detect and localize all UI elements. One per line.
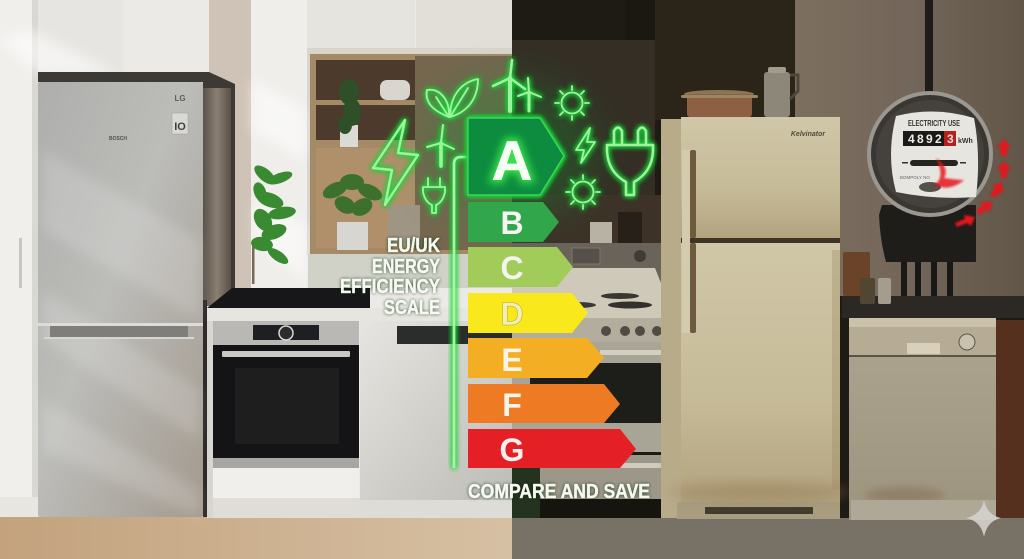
icon: two wind turbines bbox=[493, 60, 541, 111]
red rising arrows bbox=[955, 139, 1011, 227]
old dishwasher bbox=[849, 318, 996, 520]
meter fine print: BOMPOLY NO bbox=[900, 175, 930, 180]
meter dial face bbox=[891, 111, 978, 198]
meter reading: 9 bbox=[926, 132, 933, 146]
class G chevron: G bbox=[500, 432, 524, 468]
meter casing bbox=[869, 93, 991, 215]
meter reading: 8 bbox=[917, 132, 924, 146]
shelf niche bbox=[310, 54, 512, 254]
fridge brand: Bosch: BOSCH bbox=[109, 136, 127, 142]
electricity meter bbox=[869, 0, 1011, 296]
icon: large plug bbox=[607, 128, 653, 195]
scale title: EFFICIENCY bbox=[340, 276, 441, 298]
modern steel fridge bbox=[38, 72, 235, 517]
scale title: EU/UK bbox=[387, 235, 440, 257]
class D chevron: D bbox=[500, 296, 524, 332]
class F chevron bbox=[468, 384, 620, 423]
class G chevron bbox=[468, 429, 636, 468]
neon eco icons bbox=[373, 60, 653, 213]
class F chevron: F bbox=[502, 387, 522, 423]
class A chevron: A bbox=[492, 129, 532, 192]
class A chevron: A bbox=[492, 129, 532, 192]
fridge energy badge: IO bbox=[174, 121, 186, 133]
modern dishwasher bbox=[360, 321, 512, 518]
panel: efficient modern kitchen (left) bbox=[0, 0, 512, 559]
hob and worktop bbox=[207, 288, 512, 321]
icon: large lightning bolt bbox=[373, 120, 418, 205]
icon: small lightning bolt bbox=[576, 128, 595, 163]
meter reading: 2 bbox=[935, 132, 942, 146]
class B chevron bbox=[468, 202, 559, 242]
fridge energy badge bbox=[172, 113, 188, 134]
scale title bbox=[340, 235, 441, 319]
red heat swirl bbox=[934, 158, 964, 188]
scale connector line bbox=[454, 157, 468, 468]
class B chevron: B bbox=[500, 205, 524, 241]
sparkle watermark bbox=[966, 500, 1001, 537]
meter mounting box bbox=[879, 205, 976, 296]
meter label: ELECTRICITY USE bbox=[908, 119, 960, 128]
energy scale chart bbox=[468, 118, 636, 468]
icon: leaves bbox=[427, 79, 478, 117]
cooking pot bbox=[681, 90, 758, 117]
meter unit: kWh bbox=[958, 138, 973, 145]
icon: sun lower bbox=[566, 175, 600, 209]
meter reading bbox=[903, 131, 956, 146]
old cooker bbox=[512, 243, 675, 519]
class A chevron bbox=[468, 118, 564, 195]
right cabinet bbox=[996, 320, 1024, 518]
left plinth bbox=[0, 497, 207, 519]
icon: small wind turbine bbox=[427, 125, 454, 166]
caption: compare and save: COMPARE AND SAVE bbox=[468, 481, 650, 503]
class D chevron bbox=[468, 293, 588, 333]
old fridge brand: Kelvinator bbox=[791, 131, 826, 138]
class E chevron bbox=[468, 338, 604, 378]
icon: sun upper bbox=[555, 86, 589, 120]
scale title: SCALE bbox=[384, 297, 440, 319]
meter reading: 4 bbox=[908, 132, 915, 146]
class C chevron: C bbox=[500, 250, 524, 286]
jars on worktop bbox=[843, 252, 891, 304]
class E chevron: E bbox=[501, 342, 523, 378]
decorative plant bbox=[250, 162, 297, 284]
meter slot bbox=[910, 160, 958, 166]
meter reading: 3 bbox=[947, 132, 954, 146]
fridge brand: LG: LG bbox=[174, 94, 186, 103]
floor: wood bbox=[0, 517, 512, 559]
old cream fridge bbox=[661, 117, 850, 519]
scale title: ENERGY bbox=[372, 256, 441, 278]
icon: small plug bbox=[423, 178, 445, 213]
metal kettle bbox=[764, 67, 798, 117]
sunlight streaks bbox=[0, 30, 306, 280]
class C chevron bbox=[468, 247, 573, 287]
built-in oven bbox=[207, 321, 360, 518]
green ambient glow bbox=[425, 80, 595, 220]
panel: inefficient old kitchen (right) bbox=[512, 0, 1024, 559]
right worktop bbox=[842, 296, 1024, 318]
floor: concrete bbox=[512, 518, 1024, 559]
